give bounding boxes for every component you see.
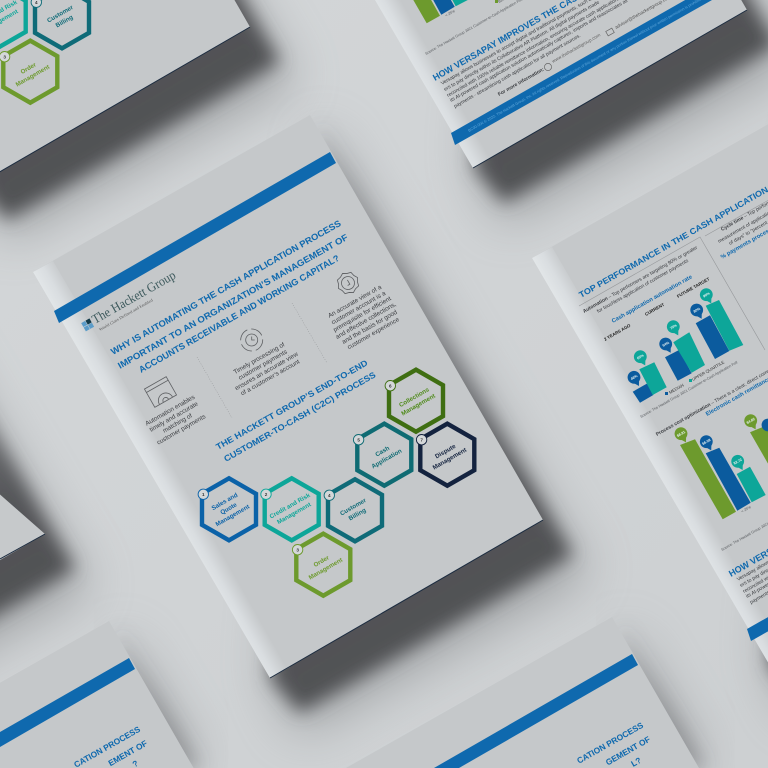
hexagon: customer billing: Customer: [46, 4, 75, 24]
source note: Source: The Hackett Group 2021 Customer-to-Cash Application Poll: [640, 360, 738, 419]
icon: badge check: [333, 268, 363, 298]
hexagon 5: cash application: [353, 424, 411, 486]
bar chart: process cost: $6.08: [702, 438, 711, 446]
main heading: WHY IS AUTOMATING THE CASH APPLICATION PROCESS: [109, 218, 343, 357]
body text: Versapay: payments - streamlining cash application for all payment sources.: [453, 33, 582, 110]
hexagon 2: credit and risk: Management: [276, 501, 312, 526]
hexagon 4: customer billing: Billing: [348, 507, 368, 522]
bar fragments: [384, 0, 470, 23]
icon: clock cycle: [241, 329, 263, 351]
legend: [665, 359, 725, 395]
panel frame right: [705, 188, 768, 236]
cycle time text: [717, 196, 768, 247]
heading: EMENT OF: [106, 738, 149, 768]
panel frame: [579, 237, 765, 350]
legend: MEDIAN: [668, 382, 685, 395]
hexagon 6: collections management: Management: [400, 393, 437, 417]
automation text: Automation – Top performers are targeting 90% or greater: [582, 245, 699, 315]
axis label: < 25%: [445, 9, 456, 18]
text: accurate view: customer experience: [346, 316, 401, 351]
text: automation: Automation enables: [144, 394, 196, 427]
heading: GEMENT OF: [604, 734, 652, 767]
bar chart: automation: [625, 286, 743, 403]
body text: Versapay: its AI-powered cash application solution automatically captures, imports and reassociates all: [449, 0, 629, 104]
logo: World Class Defined and Enabled: [98, 297, 154, 332]
logo: The Hackett Group: [89, 267, 178, 327]
hexagon: order management: 3: [3, 54, 6, 59]
hexagon 7: dispute management: Dispute: [434, 443, 458, 460]
text: accurate view: and effective collections,: [335, 301, 398, 341]
bar chart: process cost: $2.72: [733, 458, 743, 466]
hexagon 6: collections management: 6: [389, 383, 392, 388]
text: automation: timely and accurate: [148, 400, 200, 434]
bar chart: process cost: $8.81: [676, 430, 686, 438]
text: timely processing: Timely processing of: [233, 341, 286, 376]
hexagon: credit and risk: [0, 0, 26, 47]
hexagon 5: cash application: Cash: [374, 445, 391, 458]
hexagon 4: customer billing: Customer: [339, 497, 368, 517]
legend: UPPER QUARTILE: [691, 359, 725, 382]
hexagon 2: credit and risk: [261, 478, 319, 540]
book: front cover, main: [33, 115, 543, 678]
subheading: C2C: THE HACKETT GROUP’S END-TO-END: [214, 358, 369, 452]
book: back cover, top: [236, 0, 751, 168]
hexagon 3: order management: Order: [313, 554, 331, 569]
bar chart: automation: 90%: [702, 291, 711, 298]
bar chart: automation: 48%: [630, 374, 639, 381]
hexagon 1: sales and quote: [198, 478, 256, 540]
text: accurate view: An accurate view of a: [327, 284, 383, 320]
hexagon 1: sales and quote: Management: [215, 503, 251, 528]
column labels: FUTURE TARGET: [676, 276, 711, 299]
hexagon 1: sales and quote: Quote: [219, 501, 239, 516]
column labels: [603, 276, 711, 342]
contact row: [497, 0, 672, 98]
contact row: www.thehackettgroup.com: [551, 32, 601, 64]
footer band: [747, 462, 768, 641]
bar chart: process cost: [672, 412, 768, 519]
text: timely processing: ensures an accurate view: [234, 351, 300, 392]
cycle time text: of days" to "percent: [728, 220, 768, 247]
contact row: For more information:: [497, 67, 546, 98]
hexagon 7: dispute management: 7: [420, 437, 423, 442]
text: accurate view: and the basis for good: [341, 309, 399, 346]
subheading: C2C: CUSTOMER-TO-CASH (C2C) PROCESS: [222, 369, 378, 464]
blue band: [54, 152, 336, 323]
hexagon: customer billing: [31, 0, 89, 48]
hexagon 5: cash application: Application: [370, 448, 403, 470]
hexagon 7: dispute management: [416, 424, 474, 486]
hexagon: customer billing: Billing: [55, 14, 75, 29]
axis label: < 25%: [741, 505, 752, 514]
book: front cover, top left: [0, 0, 250, 185]
book: front cover, bottom left: [0, 621, 194, 768]
hexagon: customer billing: 4: [35, 0, 38, 5]
text: accurate view: [327, 284, 401, 351]
bar chart: automation: 65%: [636, 353, 645, 360]
text: timely processing: of a customer’s account: [240, 358, 301, 397]
bar chart: automation: 75%: [669, 323, 678, 330]
body text: Versapay: ers to pay directly within its Collaborative AR Platform. All digital payments made: [443, 0, 601, 93]
partial book at left edge: [0, 455, 45, 595]
main heading: ACCOUNTS RECEIVABLE AND WORKING CAPITAL?: [137, 253, 341, 375]
hexagon 2: credit and risk: Credit and Risk: [269, 492, 312, 521]
heading: CATION PROCESS: [575, 720, 645, 766]
bar chart: automation: 64%: [662, 340, 671, 348]
hexagon 1: sales and quote: 1: [202, 492, 205, 497]
hexagon 4: customer billing: [324, 479, 382, 541]
book: front cover, bottom right: [346, 617, 699, 768]
text: accurate view: prerequisite for efficient: [332, 295, 393, 334]
column labels: 2 YEARS AGO: [603, 323, 632, 342]
main heading: IMPORTANT TO AN ORGANIZATION’S MANAGEMENT OF: [116, 232, 350, 371]
hexagon 1: sales and quote: Sales and: [211, 492, 239, 512]
book: back cover, right: [532, 101, 768, 664]
hexagon 3: order management: [292, 534, 350, 596]
hexagon 3: order management: Management: [308, 557, 344, 581]
hexagon 6: collections management: Collections: [398, 386, 431, 409]
blue band: [434, 654, 638, 768]
hexagon: order management: Order: [20, 61, 38, 76]
hexagon 3: order management: 3: [296, 547, 299, 552]
column labels: CURRENT: [644, 302, 665, 317]
hexagon 4: customer billing: 4: [328, 493, 331, 498]
text: automation: customer payments: [156, 413, 207, 447]
bar chart: process cost: $4.82: [746, 417, 756, 425]
hexagon: order management: Management: [15, 64, 51, 88]
blue band: [0, 658, 135, 747]
chart title: cash application automation rate: Cash application automation rate: [611, 274, 694, 325]
icon: automation window: [144, 377, 177, 407]
text: automation: matching of: [162, 412, 194, 435]
text: timely processing: customer payments: [237, 348, 289, 382]
text: accurate view: customer account is a: [330, 290, 387, 326]
hexagon: order management: [0, 41, 57, 103]
hexagon 5: cash application: 5: [357, 437, 360, 442]
hexagon 7: dispute management: Management: [432, 447, 468, 471]
bar chart: automation: 80%: [693, 306, 702, 314]
hexagon 2: credit and risk: 2: [265, 492, 268, 497]
hexagon 6: collections management: [385, 370, 443, 432]
automation text: for touchless application of customer payments: [596, 258, 690, 315]
text: automation: [144, 394, 207, 447]
